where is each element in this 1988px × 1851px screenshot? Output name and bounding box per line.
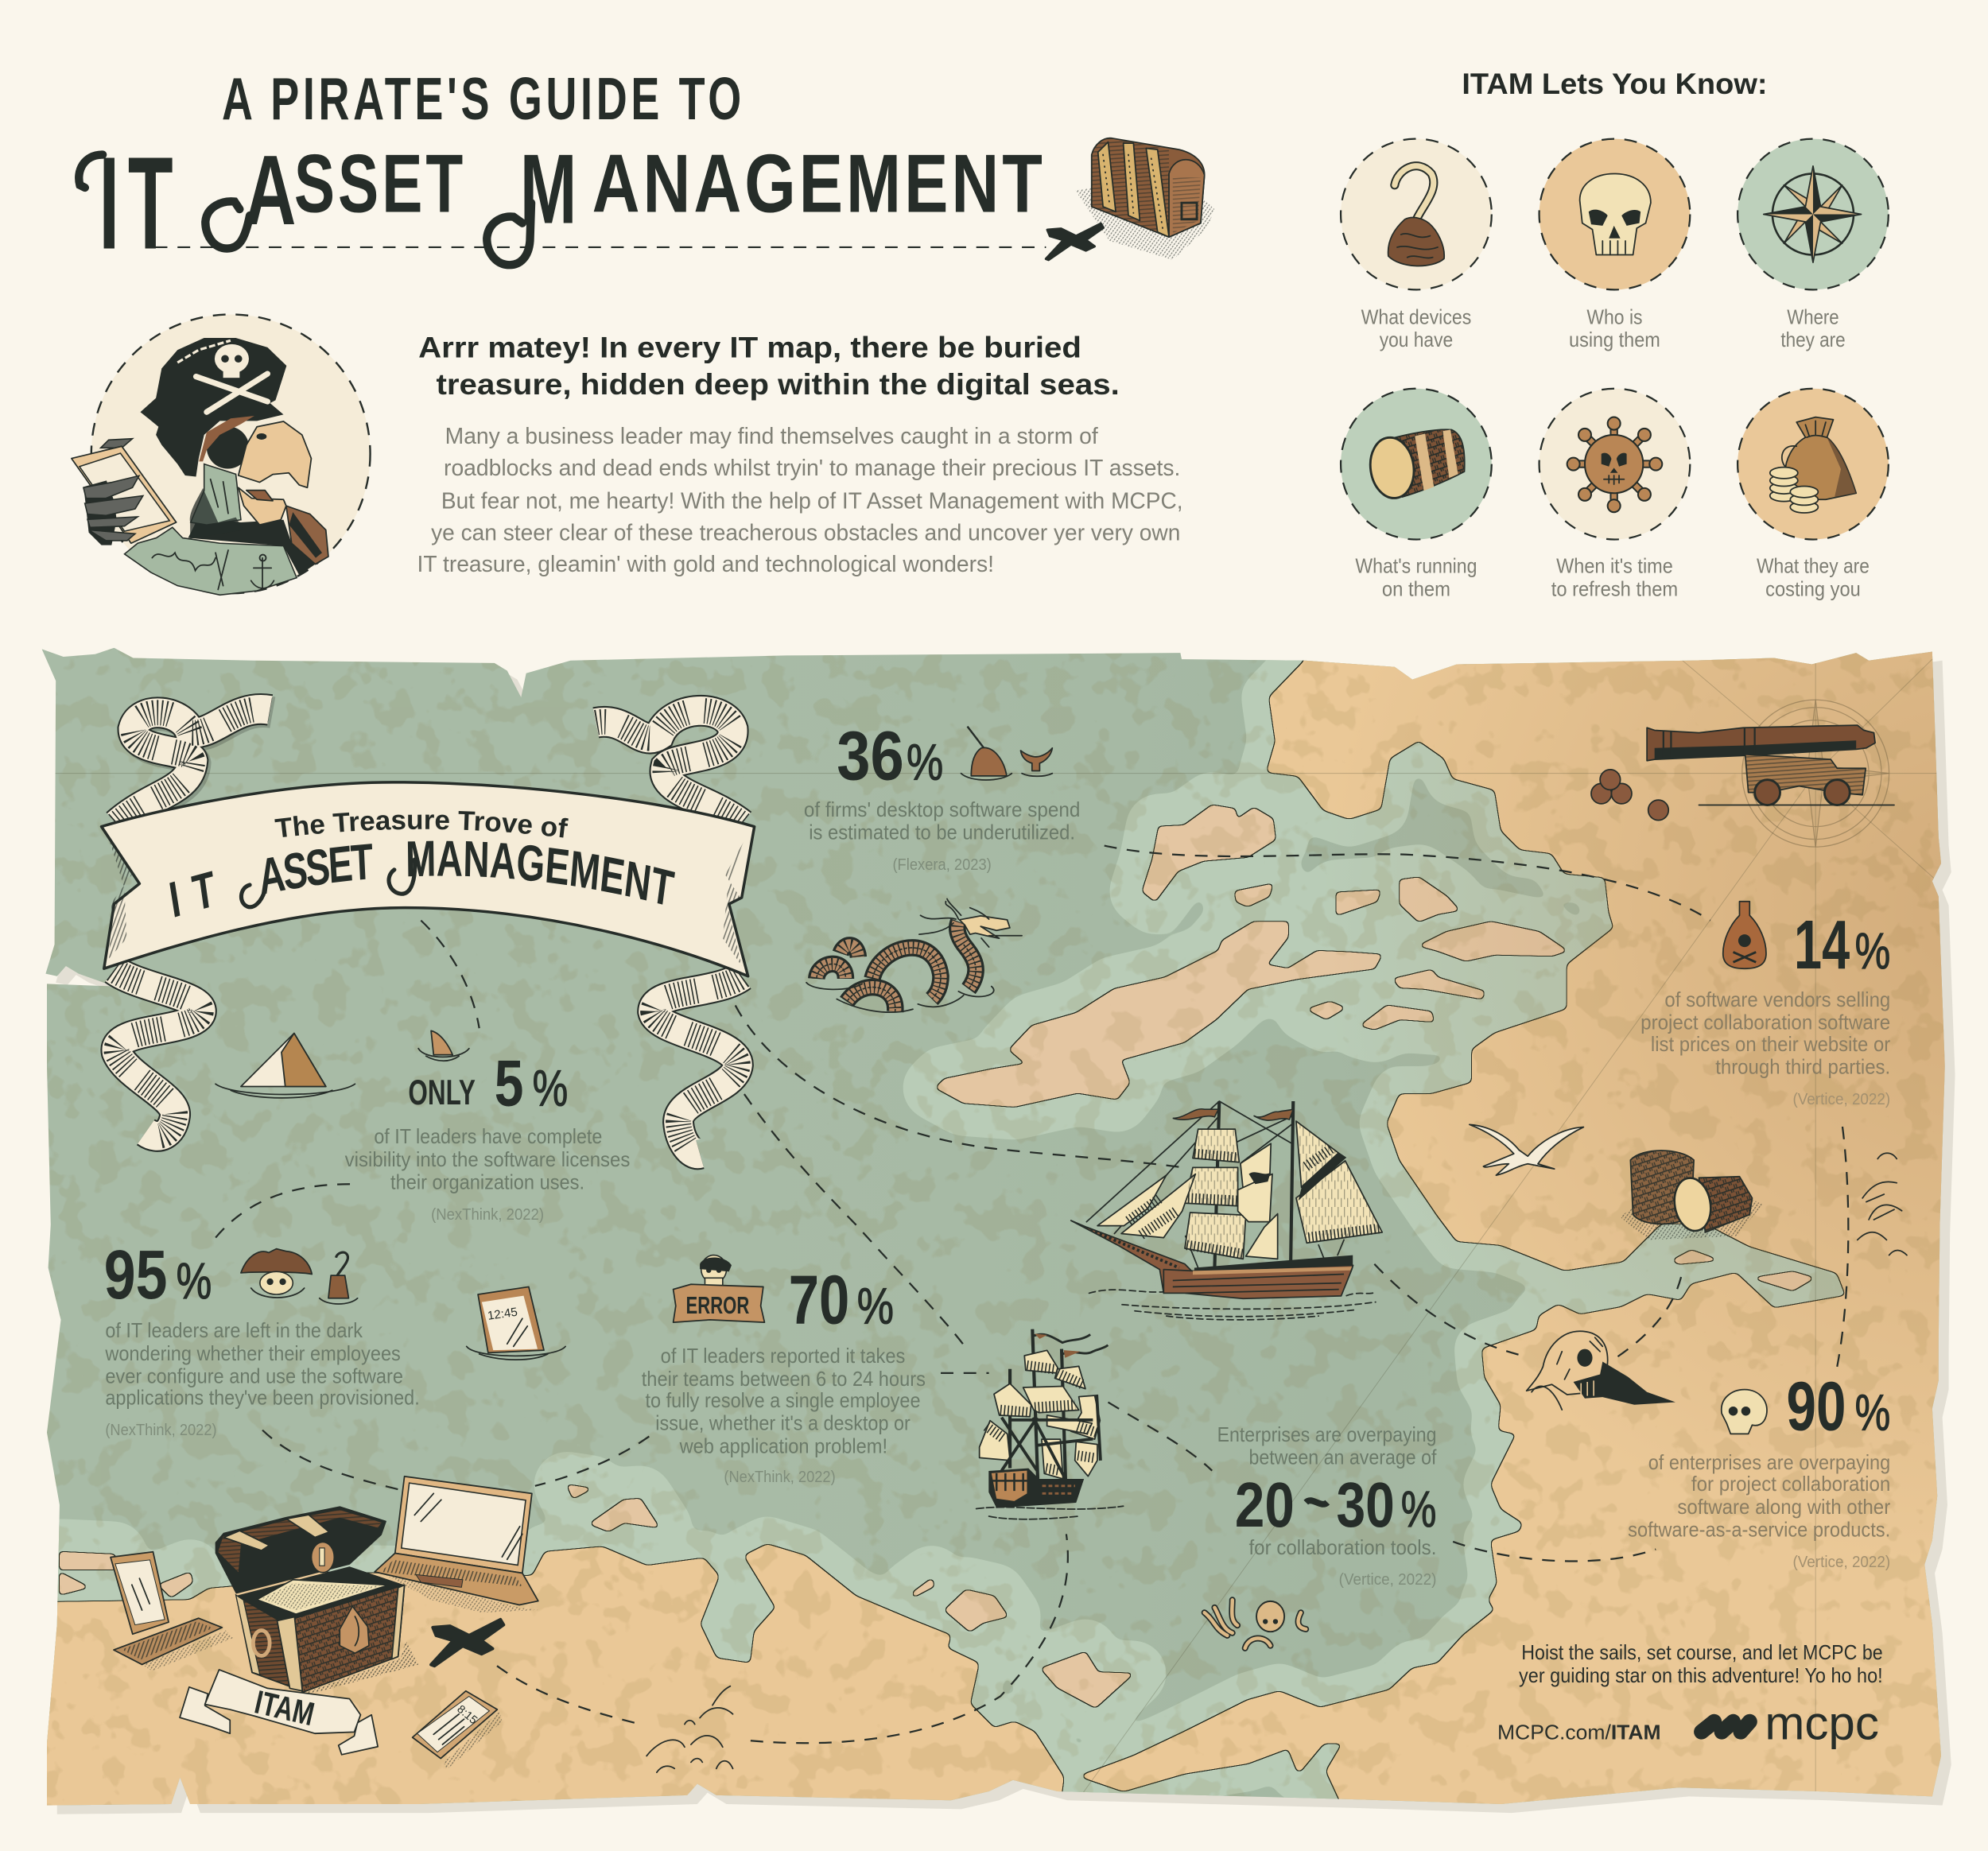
stat: only 5 percent: ONLY xyxy=(408,1073,476,1112)
stat: only 5 percent: visibility into the software licenses xyxy=(345,1149,630,1171)
small ship rigging xyxy=(1002,1395,1101,1478)
stat: enterprises overpaying 20 to 30 percent: between an average of xyxy=(1248,1447,1437,1469)
item: what they cost: costing you xyxy=(1765,578,1861,600)
icon: X marks the spot xyxy=(1046,223,1103,260)
title line one: A PIRATE'S GUIDE TO xyxy=(222,65,741,132)
hull xyxy=(1071,1220,1353,1298)
stat: 90 percent: (Vertice, 2022) xyxy=(1792,1554,1890,1571)
title line two: M xyxy=(520,134,577,245)
title dashed route xyxy=(155,246,1046,248)
item: where they are: Where xyxy=(1787,306,1839,328)
icon: sea serpent xyxy=(806,899,1022,1012)
icon: barrels xyxy=(1621,1151,1762,1240)
stat: 14 percent: (Vertice, 2022) xyxy=(1792,1091,1890,1108)
stat: 90 percent: % xyxy=(1855,1384,1890,1442)
stat: 95 percent xyxy=(104,1236,420,1439)
stat: 70 percent: to fully resolve a single employee xyxy=(646,1390,921,1412)
intro paragraph: roadblocks and dead ends whilst tryin' to manage their precious IT assets. xyxy=(444,456,1180,481)
icon: skull xyxy=(1722,1390,1767,1434)
stat: only 5 percent xyxy=(345,1046,630,1224)
stat: 36 percent: % xyxy=(907,734,943,791)
stat: 14 percent xyxy=(1640,902,1891,1108)
title line two: ANAGEMENT xyxy=(592,137,1043,229)
stat: 36 percent xyxy=(804,717,1080,874)
stat: 36 percent: is estimated to be underutilized. xyxy=(809,822,1075,844)
stat: only 5 percent: (NexThink, 2022) xyxy=(431,1206,544,1224)
intro paragraph: ye can steer clear of these treacherous obstacles and uncover yer very own xyxy=(431,520,1180,545)
ITAM ribbon xyxy=(180,1670,378,1755)
intro paragraph: IT treasure, gleamin' with gold and technological wonders! xyxy=(417,552,994,577)
stat: 90 percent: 90 xyxy=(1786,1368,1846,1445)
logo: mcpc: mcpc xyxy=(1765,1698,1879,1750)
item: when to refresh: to refresh them xyxy=(1551,578,1678,600)
treasure scene: chest and devices xyxy=(111,1477,539,1770)
stat: 95 percent: ever configure and use the software xyxy=(105,1366,403,1388)
item: what's running xyxy=(1341,389,1492,600)
call to action xyxy=(1497,1642,1883,1744)
portrait circle xyxy=(91,314,371,593)
banner title: MANAGEMENT xyxy=(407,841,675,905)
item: who is using them: Who is xyxy=(1586,306,1643,328)
smartphone in claw xyxy=(72,439,177,545)
icon: sunken phone: 12:45 xyxy=(487,1306,518,1323)
stat: 95 percent: applications they've been provisioned. xyxy=(105,1387,420,1410)
stat: 14 percent: of software vendors selling xyxy=(1664,989,1890,1011)
panel: ITAM lets you know xyxy=(1341,68,1889,600)
item: when to refresh: When it's time xyxy=(1556,556,1673,578)
stat: 90 percent xyxy=(1628,1368,1891,1571)
small ship hull xyxy=(988,1469,1084,1508)
stat: 95 percent: (NexThink, 2022) xyxy=(105,1422,217,1439)
stat: 95 percent: % xyxy=(177,1252,212,1310)
icon: small sailing ship xyxy=(977,1329,1124,1519)
icon: error sign with skull: ERROR xyxy=(686,1293,749,1319)
X marks the spot xyxy=(431,1620,503,1666)
stat: 95 percent: of IT leaders are left in the dark xyxy=(105,1320,363,1342)
stat: 70 percent: their teams between 6 to 24 hours xyxy=(642,1368,926,1391)
stat: 95 percent: 95 xyxy=(104,1236,167,1314)
stat: only 5 percent: % xyxy=(533,1059,568,1116)
stat: 90 percent: for project collaboration xyxy=(1691,1473,1890,1496)
smartphone on sand xyxy=(413,1691,502,1770)
stat: 36 percent: (Flexera, 2023) xyxy=(892,856,992,874)
stat: 70 percent: issue, whether it's a desktop or xyxy=(655,1413,911,1435)
stat: enterprises overpaying 20 to 30 percent: for collaboration tools. xyxy=(1248,1537,1436,1559)
stat: 90 percent: of enterprises are overpaying xyxy=(1648,1452,1890,1474)
stat: 70 percent xyxy=(642,1261,926,1486)
title: A Pirate's Guide to IT Asset Management xyxy=(79,65,1103,277)
pennants xyxy=(1173,1109,1293,1120)
land masses xyxy=(25,634,1988,1851)
stat: 90 percent: software along with other xyxy=(1677,1496,1891,1519)
treasure map background xyxy=(0,634,1988,1851)
icon: skull rock xyxy=(1527,1331,1675,1410)
compass rose watermark xyxy=(1742,700,1889,847)
stat: only 5 percent: of IT leaders have complete xyxy=(374,1126,602,1148)
chest left face xyxy=(236,1595,302,1691)
open chest lid xyxy=(216,1507,386,1593)
item: when to refresh xyxy=(1540,389,1690,600)
skull and crossbones xyxy=(177,340,267,412)
logo: mcpc xyxy=(1702,1698,1879,1750)
item: what devices: you have xyxy=(1380,329,1453,351)
panel heading: ITAM Lets You Know: xyxy=(1462,68,1768,100)
banner title: IT xyxy=(169,871,213,918)
laptop xyxy=(375,1477,539,1612)
intro paragraph: But fear not, me hearty! With the help of IT Asset Management with MCPC, xyxy=(441,488,1183,514)
item: what's running: What's running xyxy=(1355,556,1477,578)
icon: seabird xyxy=(1470,1124,1583,1175)
item: what's running: on them xyxy=(1382,578,1450,600)
cannonballs xyxy=(1591,770,1668,821)
stat: enterprises overpaying 20 to 30 percent: Enterprises are overpaying xyxy=(1217,1424,1436,1446)
item: what they cost xyxy=(1738,389,1889,600)
call to action: Hoist the sails, set course, and let MCPC be xyxy=(1521,1642,1883,1664)
stat: only 5 percent: 5 xyxy=(495,1046,523,1120)
ship waves xyxy=(1089,1290,1376,1320)
icon: sinking sail xyxy=(215,1034,355,1098)
item: who is using them: using them xyxy=(1569,329,1660,351)
icon: treasure chest top xyxy=(1075,138,1214,260)
item: what devices xyxy=(1341,139,1492,351)
stat: enterprises overpaying 20 to 30 percent: % xyxy=(1401,1480,1436,1538)
icon: shark fin xyxy=(418,1030,469,1061)
intro portrait: pirate parrot xyxy=(72,314,371,595)
stat: only 5 percent: their organization uses. xyxy=(390,1172,584,1194)
icon: coastal mountains south xyxy=(646,1686,733,1772)
dashed treasure routes xyxy=(212,846,1848,1743)
icon: rum bottle xyxy=(1723,902,1766,968)
title line two: A xyxy=(245,135,296,246)
intro heading: Arrr matey! In every IT map, there be buried xyxy=(418,331,1081,364)
stat: 36 percent: 36 xyxy=(837,717,904,795)
rigging xyxy=(1214,1101,1293,1268)
ribbon tails xyxy=(114,709,742,1154)
banner text paths xyxy=(277,829,567,838)
intro heading xyxy=(418,331,1120,401)
banner subtitle: The Treasure Trove of xyxy=(274,811,569,838)
stat: enterprises overpaying 20 to 30 percent: 20 xyxy=(1235,1469,1295,1540)
stat: 70 percent: 70 xyxy=(789,1261,849,1339)
shallow water bands xyxy=(25,634,1988,1851)
icon: cannon xyxy=(1591,725,1894,821)
ITAM ribbon: ITAM xyxy=(251,1683,318,1733)
paper shadow xyxy=(52,657,1955,1814)
item: who is using them xyxy=(1540,139,1690,351)
banner main scroll xyxy=(102,782,755,976)
website link: MCPC.com/ ITAM xyxy=(1497,1722,1661,1744)
small ship sails xyxy=(980,1350,1100,1479)
item: where they are: they are xyxy=(1780,329,1846,351)
call to action: yer guiding star on this adventure! Yo ho ho! xyxy=(1519,1665,1883,1687)
intro paragraph xyxy=(417,424,1183,577)
icon: pirate hat skull and hook xyxy=(241,1249,358,1304)
title line two: IT xyxy=(99,130,181,277)
chest shadow xyxy=(301,1640,418,1696)
banner title: ASSET xyxy=(261,844,372,894)
stat: 14 percent: 14 xyxy=(1794,906,1850,984)
icon: large sailing ship xyxy=(1071,1101,1382,1320)
chest right face xyxy=(278,1585,405,1693)
banner title xyxy=(169,841,675,918)
smartphone on sand: 8:15 xyxy=(454,1703,480,1727)
stat: 70 percent: (NexThink, 2022) xyxy=(724,1469,836,1486)
icon: error sign with skull xyxy=(674,1255,764,1322)
item: where they are xyxy=(1738,139,1889,351)
stat: 95 percent: wondering whether their employees xyxy=(104,1343,401,1365)
icon: sunken phone xyxy=(467,1286,565,1360)
stat: 70 percent: of IT leaders reported it takes xyxy=(661,1345,905,1368)
item: what devices: What devices xyxy=(1361,306,1471,328)
title line two xyxy=(79,130,1043,277)
pirate hat xyxy=(140,338,286,477)
stat: enterprises overpaying 20 to 30 percent xyxy=(1217,1424,1437,1589)
sails xyxy=(1097,1121,1382,1259)
stat: enterprises overpaying 20 to 30 percent: 30 xyxy=(1336,1469,1395,1540)
icon: narwhal and whale tail xyxy=(961,727,1052,780)
eye patch and strap xyxy=(199,416,254,468)
title line two: SSET xyxy=(294,138,463,230)
icon: coastal mountains east xyxy=(1858,1153,1907,1255)
banner: the treasure trove xyxy=(100,693,755,1170)
beak xyxy=(239,421,311,525)
stat: 70 percent: % xyxy=(857,1278,894,1335)
parrot body xyxy=(125,464,328,595)
item: what they cost: What they are xyxy=(1757,556,1870,578)
stat: 14 percent: project collaboration software xyxy=(1640,1012,1890,1034)
banner title swashes xyxy=(241,860,415,907)
stat: 14 percent: list prices on their website or xyxy=(1651,1034,1891,1056)
stat: 14 percent: % xyxy=(1855,922,1890,980)
map grid lines xyxy=(49,653,1939,1800)
intro heading: treasure, hidden deep within the digital seas. xyxy=(436,367,1120,401)
small ship flags xyxy=(1034,1334,1108,1354)
islands xyxy=(60,805,1815,1708)
stat: 70 percent: web application problem! xyxy=(679,1435,887,1457)
keyboard xyxy=(114,1618,233,1671)
stat: enterprises overpaying 20 to 30 percent: (Vertice, 2022) xyxy=(1339,1571,1436,1589)
stat: 14 percent: through third parties. xyxy=(1715,1057,1890,1079)
gold contents xyxy=(236,1566,405,1622)
stat: 90 percent: software-as-a-service products. xyxy=(1628,1519,1890,1542)
smartphone stand xyxy=(111,1552,169,1634)
intro paragraph: Many a business leader may find themselves caught in a storm of xyxy=(445,424,1099,449)
icon: kraken xyxy=(1205,1600,1306,1648)
stat: 36 percent: of firms' desktop software spend xyxy=(804,799,1080,821)
